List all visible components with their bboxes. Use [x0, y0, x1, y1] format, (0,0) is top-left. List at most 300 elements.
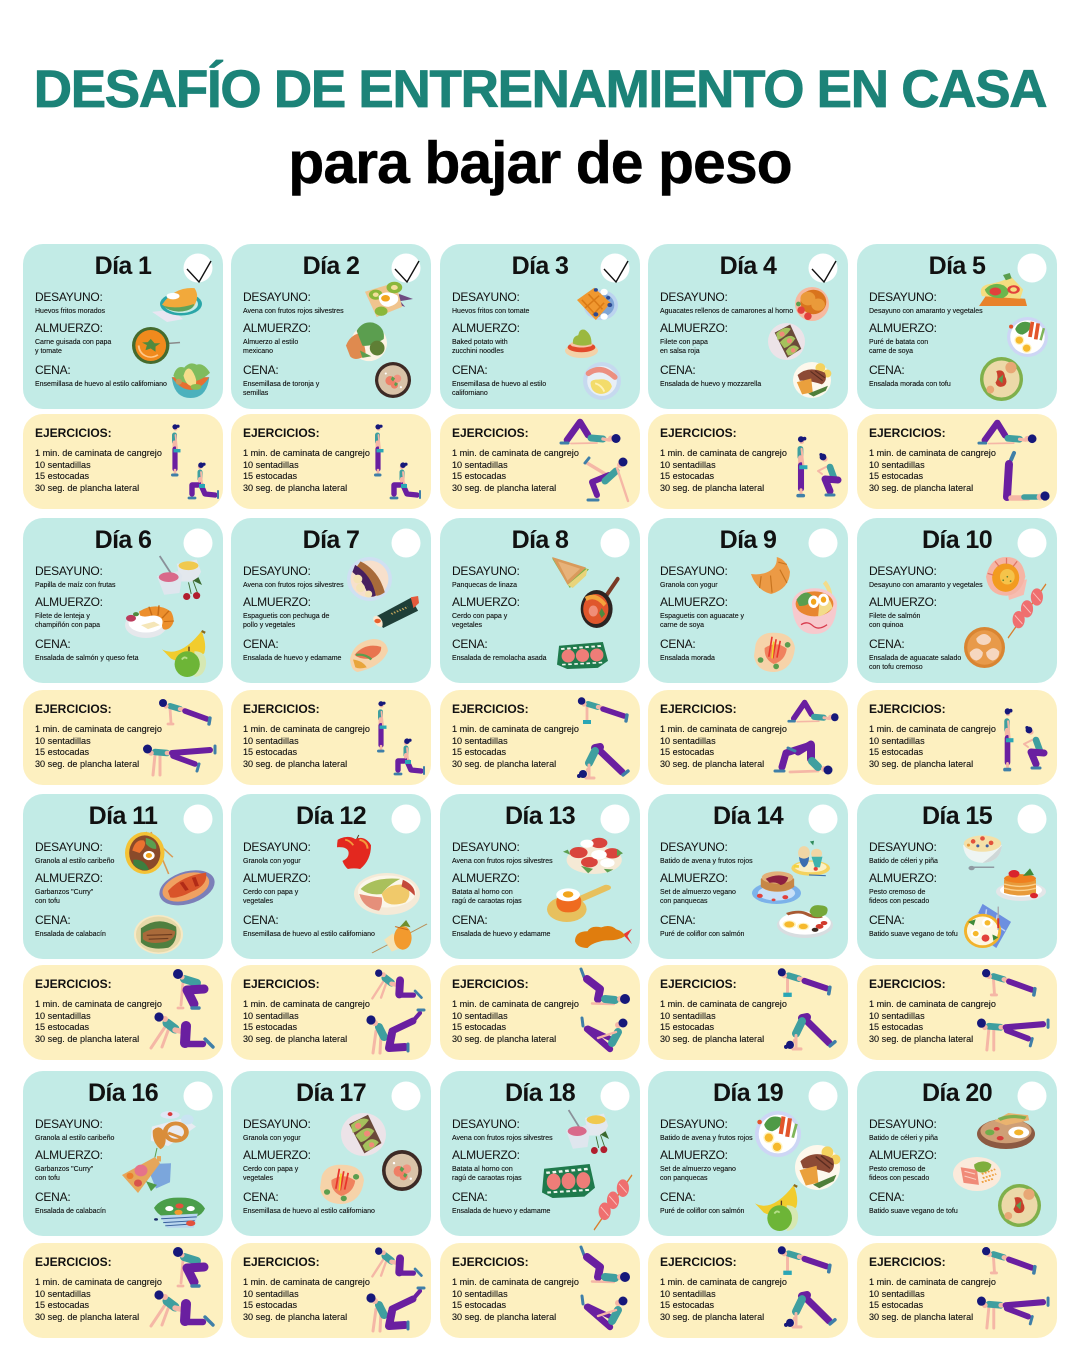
text: cena: Ensalada de salmón y queso feta [35, 655, 139, 662]
text: exercises: EJERCICIOS: [869, 977, 946, 991]
heading: Día 20 [922, 1079, 992, 1107]
text: cena: CENA: [660, 363, 695, 377]
heading: Día 11 [89, 802, 157, 830]
icon: ramen bowl [792, 582, 837, 634]
text: exercises [660, 1255, 795, 1269]
text: exercises [243, 426, 370, 493]
panel: día 10 comidas [857, 518, 1057, 683]
icon: standing woman [375, 701, 387, 753]
checkbox: empty [808, 1081, 838, 1111]
text: cena: Ensemillasa de huevo al estilo californiano [35, 381, 167, 388]
panel: día 7 comidas [231, 518, 431, 683]
panel: día 1 ejercicios: 30 seg. de plancha lateral [35, 483, 139, 493]
icon: squat [1022, 726, 1049, 771]
checkbox: empty [1017, 1081, 1047, 1111]
text: almuerzo: con tofu [35, 898, 60, 905]
icon: lunge [188, 462, 219, 500]
text: desayuno: Granola con yogur [243, 1135, 301, 1142]
panel: día 7 ejercicios: 10 sentadillas [243, 736, 299, 746]
heading: Día 15 [922, 802, 992, 830]
icon: crouch [172, 969, 210, 1011]
text: cena: CENA: [243, 913, 278, 927]
text: cena [452, 637, 630, 663]
text: almuerzo: Garbanzos "Curry" [35, 889, 93, 896]
icon: banana and apple [162, 631, 207, 677]
panel: día 1 ejercicios: 1 min. de caminata de cangrejo [35, 448, 162, 458]
text: desayuno: DESAYUNO: [869, 564, 937, 578]
text: almuerzo: ALMUERZO: [35, 321, 103, 335]
text: almuerzo: mexicano [243, 348, 273, 355]
text: almuerzo [452, 871, 630, 906]
panel: día 13 ejercicios [440, 965, 640, 1060]
panel: día 4 ejercicios: 30 seg. de plancha lateral [660, 483, 764, 493]
text: exercises [452, 1255, 587, 1269]
text: exercises: EJERCICIOS: [660, 426, 737, 440]
text: almuerzo: carne de soya [869, 348, 913, 355]
icon: açaí bowl [347, 557, 392, 601]
heading: Día 7 [303, 526, 359, 554]
text: desayuno: DESAYUNO: [869, 290, 937, 304]
text: exercises [35, 702, 170, 716]
panel: día 17 comidas [231, 1071, 431, 1236]
text: cena: Ensemillasa de huevo al estilo californiano [243, 1208, 375, 1215]
panel: día 4 ejercicios: 1 min. de caminata de cangrejo [660, 448, 787, 458]
text: almuerzo: ALMUERZO: [35, 1148, 103, 1162]
panel: día 13 ejercicios: 15 estocadas [452, 1022, 506, 1032]
text: almuerzo: Filete con papa [660, 339, 708, 346]
icon: hip raise [774, 739, 832, 775]
text: almuerzo: Pesto cremoso de [869, 1166, 925, 1173]
text: desayuno: Granola con yogur [660, 582, 718, 589]
checkbox: empty [1017, 528, 1047, 558]
checkbox: completed [392, 254, 420, 284]
panel: día 17 ejercicios: 30 seg. de plancha lateral [243, 1312, 347, 1322]
text: desayuno [660, 840, 838, 866]
panel: día 1 ejercicios: 15 estocadas [35, 471, 89, 481]
text: cena: CENA: [660, 913, 695, 927]
text: almuerzo [35, 1148, 213, 1183]
text: exercises [869, 702, 1004, 716]
panel: día 10 ejercicios: 10 sentadillas [869, 736, 925, 746]
panel: día 15 ejercicios: 1 min. de caminata de cangrejo [869, 999, 996, 1009]
panel: día 17 ejercicios [231, 1243, 431, 1338]
text: exercises [660, 426, 787, 493]
text: almuerzo [660, 871, 838, 906]
panel: día 12 ejercicios: 1 min. de caminata de cangrejo [243, 999, 370, 1009]
text: almuerzo: Cerdo con papa y [452, 613, 507, 620]
text: cena: CENA: [660, 637, 695, 651]
icon: leg kick [366, 1285, 425, 1333]
panel: día 6 ejercicios: 15 estocadas [35, 747, 89, 757]
icon: standing woman [171, 424, 180, 476]
panel: día 5 ejercicios: 30 seg. de plancha lateral [869, 483, 973, 493]
panel: día 20 ejercicios: 15 estocadas [869, 1300, 923, 1310]
text: almuerzo [243, 871, 421, 906]
text: cena: CENA: [660, 1190, 695, 1204]
text: desayuno: DESAYUNO: [35, 290, 103, 304]
text: cena: Ensalada de remolacha asada [452, 655, 547, 662]
text: exercises [452, 426, 579, 493]
text: cena [452, 1190, 630, 1216]
panel: día 17 ejercicios: 15 estocadas [243, 1300, 297, 1310]
icon: ramen top view [125, 832, 177, 874]
text: almuerzo: ALMUERZO: [660, 595, 728, 609]
icon: kneeling [148, 1012, 215, 1050]
panel: día 15 comidas [857, 794, 1057, 959]
heading: Día 19 [713, 1079, 783, 1107]
icon: chicken plate [346, 322, 387, 362]
text: cena [452, 363, 546, 397]
panel: día 10 ejercicios: 30 seg. de plancha lateral [869, 759, 973, 769]
icon: egg and bacon plate [1007, 317, 1048, 357]
text: almuerzo [243, 321, 311, 355]
heading: Día 2 [303, 252, 359, 280]
icon: mixed plate [354, 873, 420, 915]
text: desayuno: Desayuno con amaranto y vegetales [869, 582, 983, 589]
panel: día 2 comidas [231, 244, 431, 409]
heading: Día 14 [713, 802, 783, 830]
panel: día 14 ejercicios [648, 965, 848, 1060]
icon: dumbbell plank [578, 696, 630, 725]
checkbox: empty [808, 804, 838, 834]
text: exercises: EJERCICIOS: [869, 1255, 946, 1269]
text: desayuno: Batido de avena y frutos rojos [660, 858, 753, 865]
icon: cutting board [121, 1148, 171, 1193]
panel: día 19 ejercicios: 10 sentadillas [660, 1289, 716, 1299]
checkbox: empty [183, 1081, 213, 1111]
text: cena: con tofu cremoso [869, 664, 923, 671]
text: almuerzo: Filete de salmón [869, 613, 920, 620]
icon: pastries [148, 1111, 196, 1150]
text: desayuno: DESAYUNO: [452, 564, 520, 578]
text: cena [660, 637, 838, 663]
text: cena: CENA: [452, 363, 487, 377]
text: desayuno [243, 1117, 421, 1143]
text: exercises [35, 1255, 170, 1269]
icon: plank [982, 1246, 1038, 1275]
icon: baked shell [986, 557, 1027, 600]
text: desayuno: Granola al estilo caribeño [35, 1135, 114, 1142]
text: almuerzo: ALMUERZO: [243, 321, 311, 335]
text: desayuno: Batido de avena y frutos rojos [660, 1135, 753, 1142]
text: almuerzo: ALMUERZO: [869, 871, 937, 885]
text: almuerzo: Garbanzos "Curry" [35, 1166, 93, 1173]
icon: wrap plate [754, 632, 795, 672]
title: DESAFÍO DE ENTRENAMIENTO EN CASA [34, 60, 1046, 119]
text: desayuno [35, 840, 213, 866]
icon: legs up [1002, 451, 1050, 503]
icon: fruit skewer [372, 920, 427, 953]
panel: día 16 comidas [23, 1071, 223, 1236]
panel: día 18 comidas [440, 1071, 640, 1236]
icon: beet rolls [557, 642, 608, 669]
icon: avocado toast plate [341, 1113, 386, 1156]
panel: día 12 ejercicios: 30 seg. de plancha lateral [243, 1034, 347, 1044]
text: desayuno [660, 564, 838, 590]
icon: dumbbell plank [778, 967, 833, 998]
panel: día 5 comidas [857, 244, 1057, 409]
text: almuerzo [452, 321, 520, 355]
panel: día 10 ejercicios: 1 min. de caminata de cangrejo [869, 724, 996, 734]
text: desayuno: Aguacates rellenos de camarones al horno [660, 308, 793, 315]
icon: lunge [390, 462, 421, 500]
text: cena: CENA: [452, 913, 487, 927]
text: almuerzo: vegetales [452, 622, 482, 629]
text: almuerzo: Espaguetis con aguacate y [660, 613, 744, 620]
icon: egg and bacon plate [755, 1111, 801, 1157]
panel: día 8 ejercicios: 15 estocadas [452, 747, 506, 757]
text: exercises: EJERCICIOS: [452, 1255, 529, 1269]
panel: día 20 ejercicios: 1 min. de caminata de cangrejo [869, 1277, 996, 1287]
panel: día 5 ejercicios: 10 sentadillas [869, 460, 925, 470]
text: exercises: EJERCICIOS: [660, 702, 737, 716]
text: desayuno: DESAYUNO: [660, 1117, 728, 1131]
panel: día 7 ejercicios: 1 min. de caminata de cangrejo [243, 724, 370, 734]
text: almuerzo: ALMUERZO: [660, 871, 728, 885]
text: almuerzo: Set de almuerzo vegano [660, 889, 736, 896]
icon: v-sit [580, 1294, 628, 1331]
text: desayuno [869, 840, 1047, 866]
text: almuerzo: fideos con pescado [869, 898, 929, 905]
heading: Día 1 [95, 252, 151, 280]
panel: día 1 ejercicios [23, 414, 223, 509]
icon: frying pan [579, 578, 621, 628]
icon: avocado toast plate [768, 323, 805, 360]
icon: banana and apple [755, 1185, 799, 1231]
text: cena [452, 913, 630, 939]
text: desayuno: Papilla de maíz con frutas [35, 582, 116, 589]
text: desayuno: DESAYUNO: [452, 840, 520, 854]
panel: día 10 ejercicios [857, 690, 1057, 785]
text: desayuno: DESAYUNO: [35, 564, 103, 578]
text: cena: CENA: [452, 637, 487, 651]
text: cena: CENA: [869, 637, 904, 651]
text: almuerzo: ALMUERZO: [452, 595, 520, 609]
heading: Día 18 [505, 1079, 575, 1107]
panel: día 6 ejercicios: 30 seg. de plancha lateral [35, 759, 139, 769]
text: cena: Ensalada de huevo y edamame [452, 931, 550, 938]
checkbox: empty [391, 804, 421, 834]
checkbox: empty [600, 1081, 630, 1111]
text: desayuno: Granola con yogur [243, 858, 301, 865]
panel: día 13 ejercicios: 10 sentadillas [452, 1011, 508, 1021]
text: cena: Ensemillasa de huevo al estilo [452, 381, 546, 388]
icon: wrap plate [320, 1164, 364, 1204]
text: almuerzo: con panquecas [660, 898, 707, 905]
icon: plank leg lift [977, 1295, 1051, 1330]
panel: día 15 ejercicios: 15 estocadas [869, 1022, 923, 1032]
icon: plank [159, 698, 213, 726]
text: desayuno: DESAYUNO: [243, 1117, 311, 1131]
panel: día 3 comidas [440, 244, 640, 409]
text: almuerzo [243, 1148, 421, 1183]
text: desayuno: Avena con frutos rojos silvestres [452, 1135, 553, 1142]
text: desayuno: DESAYUNO: [243, 564, 311, 578]
icon: downward dog [783, 1013, 837, 1051]
icon: crunch [578, 967, 630, 1005]
text: cena: CENA: [35, 637, 70, 651]
icon: steak plate [795, 1145, 840, 1190]
icon: croissant [751, 557, 790, 594]
text: cena [35, 1190, 213, 1216]
text: exercises: EJERCICIOS: [452, 977, 529, 991]
icon: squat [817, 453, 842, 496]
text: exercises: EJERCICIOS: [35, 702, 112, 716]
panel: día 18 ejercicios: 15 estocadas [452, 1300, 506, 1310]
panel: día 7 ejercicios: 15 estocadas [243, 747, 297, 757]
text: cena: Ensalada de huevo y edamame [243, 655, 341, 662]
panel: día 3 ejercicios: 30 seg. de plancha lateral [452, 483, 556, 493]
text: cena: CENA: [869, 1190, 904, 1204]
panel: día 18 ejercicios: 1 min. de caminata de cangrejo [452, 1277, 579, 1287]
text: almuerzo: fideos con pescado [869, 1175, 929, 1182]
panel: día 4 comidas [648, 244, 848, 409]
panel: día 16 ejercicios: 1 min. de caminata de cangrejo [35, 1277, 162, 1287]
panel: día 8 comidas [440, 518, 640, 683]
text: cena: CENA: [869, 363, 904, 377]
icon: sushi roll [373, 596, 419, 628]
text: almuerzo: ALMUERZO: [660, 1148, 728, 1162]
text: exercises [660, 702, 795, 716]
panel: día 15 ejercicios: 30 seg. de plancha lateral [869, 1034, 973, 1044]
text: almuerzo: carne de soya [660, 622, 704, 629]
panel: día 15 ejercicios: 10 sentadillas [869, 1011, 925, 1021]
panel: día 6 ejercicios [23, 690, 223, 785]
text: cena [243, 637, 421, 663]
icon: steak round plate [134, 915, 183, 954]
icon: standing woman [374, 424, 384, 476]
text: cena: Ensemillasa de huevo al estilo californiano [243, 931, 375, 938]
text: almuerzo: en salsa roja [660, 348, 700, 355]
text: exercises [452, 977, 587, 991]
text: cena [660, 1190, 838, 1216]
panel: día 4 ejercicios [648, 414, 848, 509]
text: cena: CENA: [869, 913, 904, 927]
panel: día 20 ejercicios: 10 sentadillas [869, 1289, 925, 1299]
panel: día 3 ejercicios [440, 414, 640, 509]
panel: día 12 ejercicios [231, 965, 431, 1060]
icon: grain bowl [375, 362, 411, 398]
panel: día 12 ejercicios: 10 sentadillas [243, 1011, 299, 1021]
text: exercises: EJERCICIOS: [243, 977, 320, 991]
text: cena: CENA: [35, 363, 70, 377]
text: cena [35, 913, 213, 939]
panel: día 2 ejercicios: 30 seg. de plancha lateral [243, 483, 347, 493]
text: cena [869, 913, 1047, 939]
text: almuerzo: con panquecas [660, 1175, 707, 1182]
text: exercises [35, 977, 170, 991]
text: almuerzo: ALMUERZO: [35, 595, 103, 609]
text: exercises: EJERCICIOS: [869, 702, 946, 716]
text: desayuno [35, 564, 213, 590]
text: almuerzo: con tofu [35, 1175, 60, 1182]
text: almuerzo [869, 595, 1047, 630]
text: almuerzo: zucchini noodles [452, 348, 504, 355]
panel: día 19 comidas [648, 1071, 848, 1236]
icon: glute bridge [560, 418, 620, 444]
text: desayuno: DESAYUNO: [869, 840, 937, 854]
text: exercises: EJERCICIOS: [35, 977, 112, 991]
panel: día 6 comidas [23, 518, 223, 683]
text: desayuno [452, 564, 630, 590]
text: cena: Batido suave vegano de tofu [869, 931, 958, 938]
panel: día 13 ejercicios: 1 min. de caminata de cangrejo [452, 999, 579, 1009]
text: cena [869, 637, 1047, 672]
text: almuerzo: ALMUERZO: [243, 871, 311, 885]
panel: día 18 ejercicios: 30 seg. de plancha lateral [452, 1312, 556, 1322]
icon: yogurt and cherries [566, 1110, 609, 1154]
text: desayuno: Avena con frutos rojos silvestres [243, 582, 344, 589]
text: exercises [869, 977, 1004, 991]
text: almuerzo: ALMUERZO: [452, 871, 520, 885]
heading: Día 3 [512, 252, 568, 280]
text: almuerzo: Cerdo con papa y [243, 1166, 298, 1173]
icon: waffle plate [577, 288, 618, 320]
panel: día 11 ejercicios: 30 seg. de plancha lateral [35, 1034, 139, 1044]
text: desayuno [869, 1117, 1047, 1143]
text: exercises [243, 977, 378, 991]
panel: día 3 ejercicios: 1 min. de caminata de cangrejo [452, 448, 579, 458]
panel: día 8 ejercicios [440, 690, 640, 785]
icon: kneeling [370, 969, 423, 1000]
text: cena [35, 637, 213, 663]
icon: triangle sandwich [552, 557, 589, 588]
text: almuerzo: ALMUERZO: [452, 1148, 520, 1162]
panel: día 13 comidas [440, 794, 640, 959]
panel: día 9 ejercicios: 30 seg. de plancha lateral [660, 759, 764, 769]
icon: leg kick [366, 1007, 425, 1055]
heading: Día 4 [720, 252, 776, 280]
panel: día 14 ejercicios: 1 min. de caminata de cangrejo [660, 999, 787, 1009]
text: exercises: EJERCICIOS: [243, 702, 320, 716]
text: desayuno [35, 290, 105, 315]
panel: día 8 ejercicios: 30 seg. de plancha lateral [452, 759, 556, 769]
icon: hummus [980, 357, 1023, 401]
panel: día 5 ejercicios [857, 414, 1057, 509]
icon: kneeling [370, 1247, 423, 1278]
text: desayuno: DESAYUNO: [660, 290, 728, 304]
checkbox: empty [1017, 804, 1047, 834]
text: almuerzo: Puré de batata con [869, 339, 928, 346]
checkbox: empty [391, 1081, 421, 1111]
text: almuerzo [452, 595, 630, 630]
icon: grain bowl [382, 1150, 422, 1191]
text: almuerzo [869, 321, 1047, 356]
icon: crunch [578, 1245, 630, 1283]
text: almuerzo: ragú de caraotas rojas [452, 898, 522, 905]
icon: skewer [594, 1175, 632, 1230]
text: desayuno: Avena con frutos rojos silvestres [243, 308, 344, 315]
panel: día 11 comidas [23, 794, 223, 959]
text: desayuno: DESAYUNO: [660, 840, 728, 854]
text: cena: CENA: [452, 1190, 487, 1204]
panel: día 20 comidas [857, 1071, 1057, 1236]
heading: Día 9 [720, 526, 776, 554]
icon: standing woman [1001, 708, 1014, 772]
panel: día 2 ejercicios [231, 414, 431, 509]
icon: dumplings [964, 627, 1005, 668]
heading: Día 8 [512, 526, 568, 554]
text: cena [35, 363, 167, 388]
text: almuerzo: Cerdo con papa y [243, 889, 298, 896]
icon: crouch [172, 1247, 210, 1289]
panel: día 7 ejercicios [231, 690, 431, 785]
icon: yogurt and cherries [157, 556, 202, 600]
text: almuerzo [35, 871, 213, 906]
text: almuerzo [35, 595, 213, 630]
icon: kiwi toast [365, 282, 413, 317]
text: desayuno [869, 564, 1047, 590]
